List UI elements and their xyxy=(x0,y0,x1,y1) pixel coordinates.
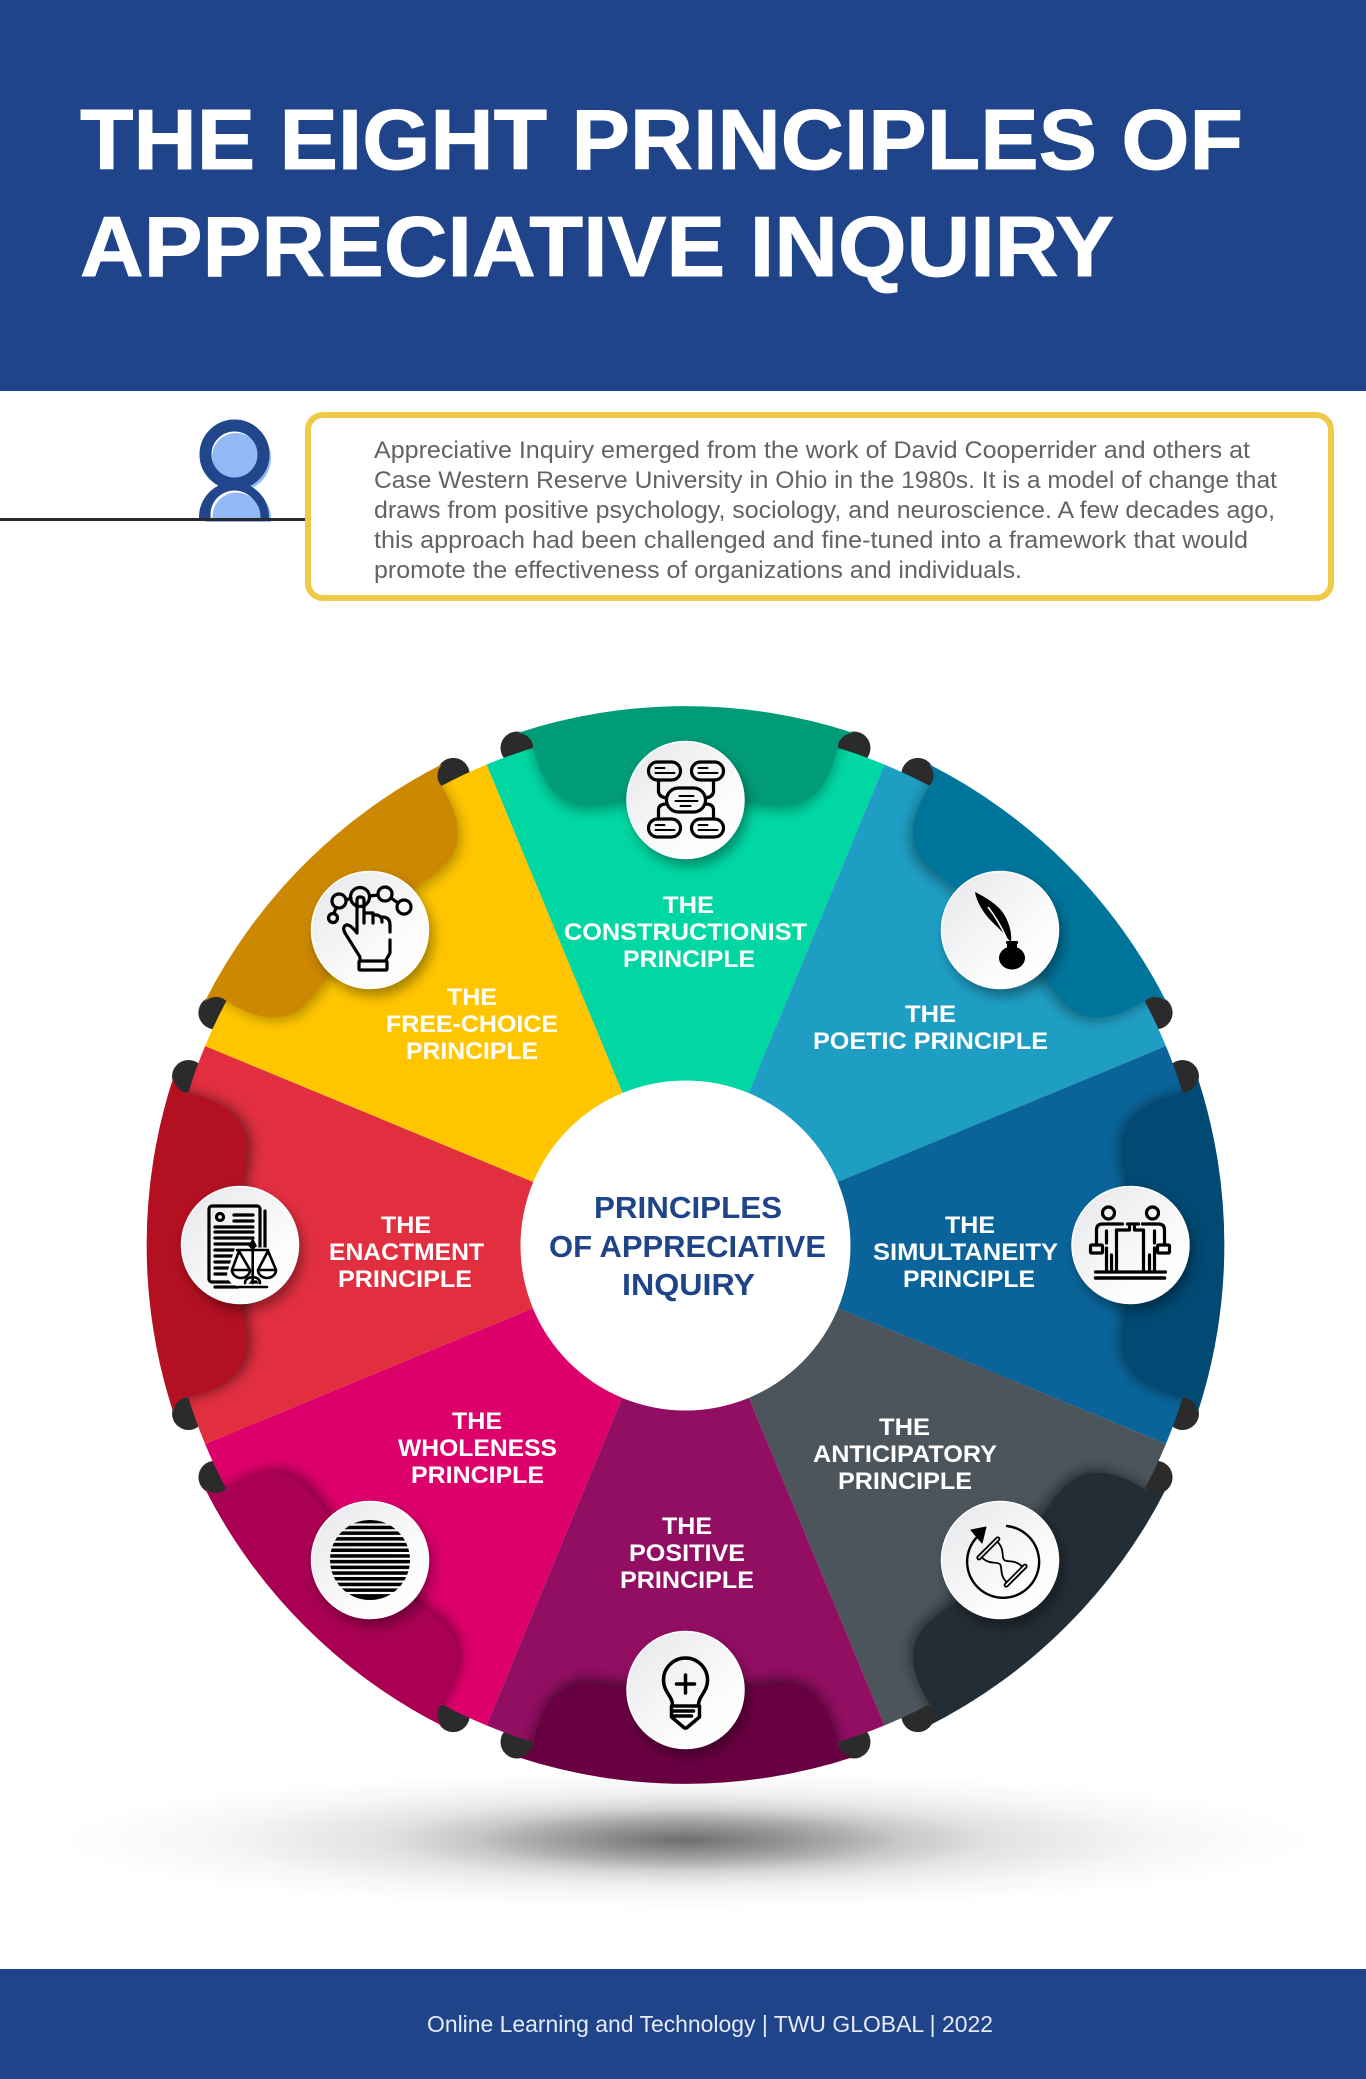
title xyxy=(80,93,1243,295)
center circle: INQUIRY xyxy=(622,1268,755,1302)
label: the simultaneity principle: SIMULTANEITY xyxy=(873,1239,1058,1266)
footer banner xyxy=(0,1969,1366,2079)
label: the constructionist principle xyxy=(564,892,807,973)
icon: hand touching nodes xyxy=(312,872,433,996)
label: the anticipatory principle: PRINCIPLE xyxy=(838,1468,972,1495)
label: the free-choice principle: PRINCIPLE xyxy=(406,1038,538,1065)
label: the free-choice principle: THE xyxy=(447,984,497,1011)
icon: striped circle xyxy=(312,1502,433,1626)
label: the constructionist principle: THE xyxy=(663,892,714,919)
title: THE EIGHT PRINCIPLES OF xyxy=(80,93,1243,188)
label: the enactment principle xyxy=(329,1212,484,1293)
connector line xyxy=(0,518,308,521)
label: the wholeness principle: THE xyxy=(452,1408,502,1435)
panel: simultaneity principle xyxy=(838,1046,1224,1444)
ground shadow xyxy=(56,1770,1316,1910)
intro text box: Case Western Reserve University in Ohio in the 1980s. It is a model of change that xyxy=(374,467,1277,494)
intro text box: Appreciative Inquiry emerged from the work of David Cooperrider and others at xyxy=(374,437,1250,464)
panel: anticipatory principle xyxy=(749,1308,1173,1732)
label: the positive principle xyxy=(620,1513,754,1594)
label: the enactment principle: ENACTMENT xyxy=(329,1239,484,1266)
panel: wholeness principle xyxy=(198,1308,622,1732)
label: the wholeness principle: PRINCIPLE xyxy=(411,1462,544,1489)
icon: document and scales xyxy=(182,1186,303,1311)
label: the anticipatory principle xyxy=(813,1414,997,1495)
label: the enactment principle: THE xyxy=(381,1212,431,1239)
label: the free-choice principle: FREE-CHOICE xyxy=(386,1011,558,1038)
icon: figure eight person xyxy=(199,420,271,522)
title: APPRECIATIVE INQUIRY xyxy=(80,200,1114,295)
panel: enactment principle xyxy=(146,1046,534,1444)
icon: quill and ink xyxy=(942,872,1063,996)
icon: two people at a door xyxy=(1072,1186,1194,1311)
panel: positive principle xyxy=(486,1398,884,1784)
label: the simultaneity principle xyxy=(873,1212,1058,1293)
label: the poetic principle: THE xyxy=(905,1001,956,1028)
center circle xyxy=(520,1080,850,1410)
intro text box: this approach had been challenged and fine-tuned into a framework that would xyxy=(374,527,1248,554)
label: the poetic principle: POETIC PRINCIPLE xyxy=(813,1028,1048,1055)
label: the positive principle: PRINCIPLE xyxy=(620,1567,754,1594)
label: the free-choice principle xyxy=(386,984,558,1065)
label: the constructionist principle: PRINCIPLE xyxy=(623,946,755,973)
label: the enactment principle: PRINCIPLE xyxy=(338,1266,472,1293)
label: the wholeness principle xyxy=(398,1408,557,1489)
center circle: OF APPRECIATIVE xyxy=(549,1230,826,1264)
panel: poetic principle xyxy=(748,758,1173,1182)
intro text box xyxy=(308,415,1331,598)
panel: free-choice principle xyxy=(198,758,622,1182)
label: the anticipatory principle: ANTICIPATORY xyxy=(813,1441,997,1468)
label: the anticipatory principle: THE xyxy=(879,1414,930,1441)
label: the simultaneity principle: THE xyxy=(945,1212,995,1239)
label: the positive principle: THE xyxy=(662,1513,712,1540)
panel: constructionist principle xyxy=(486,706,884,1093)
label: the wholeness principle: WHOLENESS xyxy=(398,1435,557,1462)
intro text box: draws from positive psychology, sociology, and neuroscience. A few decades ago, xyxy=(374,497,1275,524)
label: the poetic principle xyxy=(813,1001,1048,1055)
intro text box: promote the effectiveness of organizations and individuals. xyxy=(374,557,1022,584)
label: the constructionist principle: CONSTRUCTIONIST xyxy=(564,919,807,946)
footer banner: Online Learning and Technology | TWU GLOBAL | 2022 xyxy=(427,2011,993,2037)
label: the simultaneity principle: PRINCIPLE xyxy=(903,1266,1035,1293)
icon: light bulb with plus xyxy=(627,1632,748,1756)
icon: hourglass with arrow xyxy=(942,1502,1063,1626)
label: the positive principle: POSITIVE xyxy=(629,1540,745,1567)
header banner xyxy=(0,0,1366,391)
center circle: PRINCIPLES xyxy=(594,1191,782,1225)
icon: concept map xyxy=(627,742,748,866)
